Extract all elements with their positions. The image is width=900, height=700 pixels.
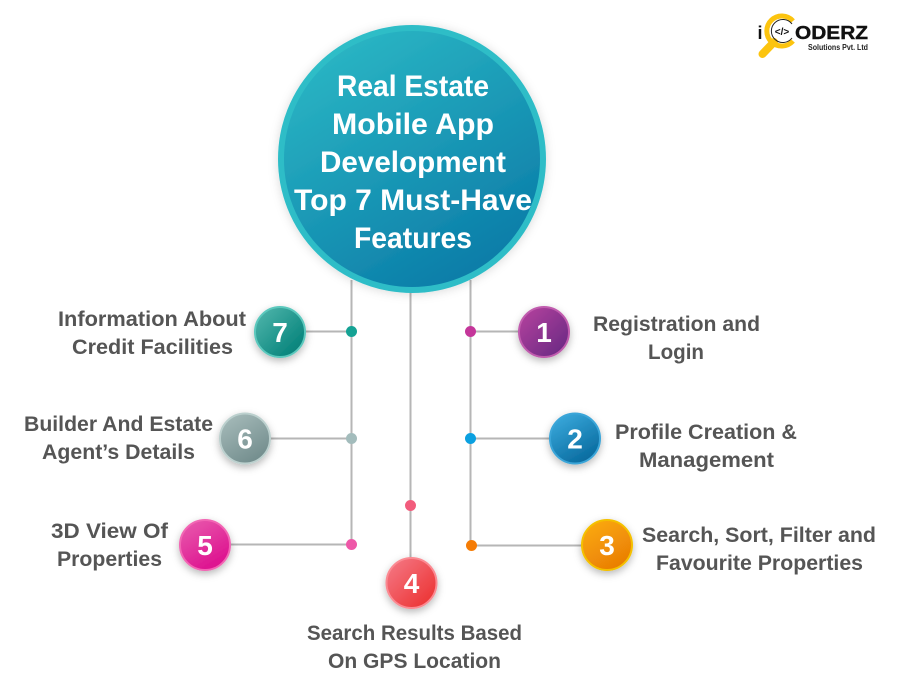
logo: iCODERZ Solutions Pvt. Ltd: Solutions Pvt. Ltd: [808, 43, 868, 52]
logo: iCODERZ Solutions Pvt. Ltd: i: [758, 23, 763, 43]
feature 7: Information About Credit Facilities: Information About: [58, 308, 246, 331]
title: Mobile App: [332, 108, 494, 141]
feature 1: Registration and Login: Login: [648, 341, 704, 364]
feature 5: 3D View Of Properties: [51, 520, 357, 571]
feature 4: Search Results Based On GPS Location: 4: [404, 568, 420, 599]
feature 2: Profile Creation & Management: Management: [639, 449, 774, 472]
title: Development: [320, 146, 506, 179]
feature 4: Search Results Based On GPS Location: On GPS Location: [328, 650, 501, 673]
feature 6: Builder And Estate Agent's Details: Builder And Estate: [24, 413, 213, 436]
feature 3: Search, Sort, Filter and Favourite Properties: Favourite Properties: [656, 552, 863, 575]
feature 1: Registration and Login: Registration and: [593, 313, 760, 336]
title: Real Estate: [337, 70, 489, 103]
title: Features: [354, 222, 472, 255]
feature 4: Search Results Based On GPS Location: [307, 500, 522, 673]
feature 4: Search Results Based On GPS Location: Search Results Based: [307, 622, 522, 645]
feature 3: Search, Sort, Filter and Favourite Properties: [466, 520, 876, 575]
feature 7: Information About Credit Facilities: Credit Facilities: [72, 336, 233, 359]
logo: iCODERZ Solutions Pvt. Ltd: ODERZ: [795, 23, 868, 43]
logo: iCODERZ Solutions Pvt. Ltd: [758, 16, 868, 54]
feature 6: Builder And Estate Agent's Details: 6: [237, 424, 253, 454]
feature 1: Registration and Login: [465, 307, 760, 364]
feature 6: Builder And Estate Agent's Details: Agent’s Details: [42, 441, 195, 464]
main circle with title: [281, 28, 543, 290]
feature 3: Search, Sort, Filter and Favourite Properties: Search, Sort, Filter and: [642, 524, 876, 547]
feature 5: 3D View Of Properties: Properties: [57, 548, 162, 571]
icon: magnifying glass: </>: [775, 27, 789, 38]
title: Top 7 Must-Have: [294, 184, 532, 217]
feature 3: Search, Sort, Filter and Favourite Properties: 3: [599, 530, 615, 561]
feature 7: Information About Credit Facilities: [58, 307, 357, 359]
feature 5: 3D View Of Properties: 3D View Of: [51, 520, 169, 543]
feature 5: 3D View Of Properties: 5: [197, 530, 213, 561]
feature 2: Profile Creation & Management: 2: [567, 424, 583, 454]
feature 2: Profile Creation & Management: Profile Creation &: [615, 421, 797, 444]
feature 1: Registration and Login: 1: [536, 317, 552, 348]
connector lines: [225, 280, 585, 562]
feature 7: Information About Credit Facilities: 7: [272, 317, 288, 348]
feature 6: Builder And Estate Agent's Details: [24, 413, 357, 464]
title: [294, 70, 532, 255]
feature 2: Profile Creation & Management: [465, 414, 797, 472]
